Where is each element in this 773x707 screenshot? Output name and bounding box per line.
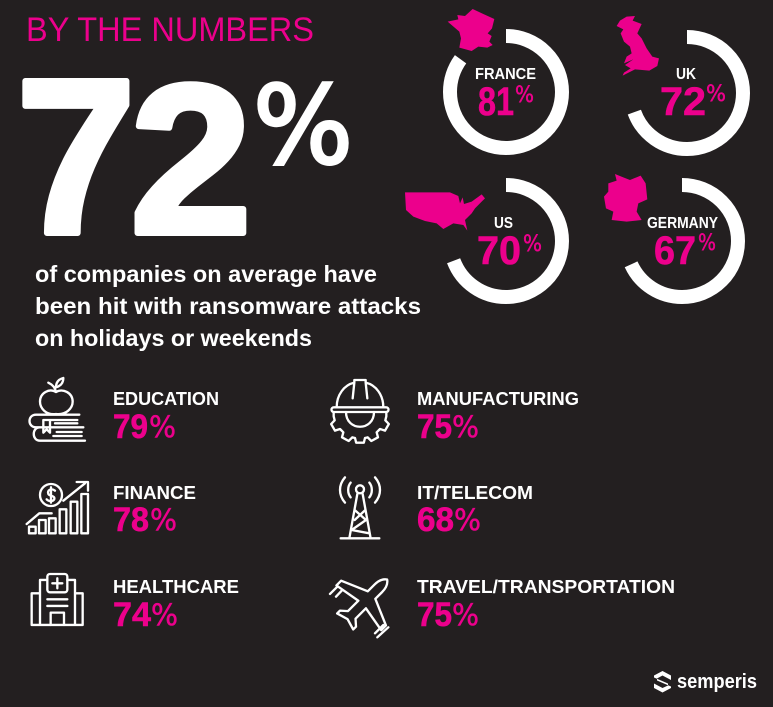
panel: IT/Telecom: % xyxy=(454,503,481,537)
panel: UK: % xyxy=(706,82,726,107)
panel: Germany: 67 xyxy=(654,229,696,273)
panel: IT/Telecom: IT/TELECOM xyxy=(417,482,533,503)
panel: Healthcare xyxy=(32,574,239,634)
panel: Travel/Transportation: 75 xyxy=(417,596,452,634)
icon: hospital building xyxy=(32,574,83,625)
title: BY THE NUMBERS xyxy=(26,11,314,49)
icon: Germany map xyxy=(604,174,647,222)
panel: UK: UK xyxy=(676,66,696,83)
icon: radio tower xyxy=(340,477,380,538)
panel: Germany xyxy=(604,174,738,297)
panel: IT/Telecom: 68 xyxy=(417,501,454,539)
panel: Education: 79 xyxy=(113,408,148,446)
headline stat: 72%: 2 xyxy=(130,41,252,279)
headline description: of companies on average have xyxy=(35,261,377,287)
panel: Finance xyxy=(27,482,196,539)
panel: Manufacturing: MANUFACTURING xyxy=(417,388,579,409)
panel: France: 81 xyxy=(478,80,514,124)
headline description xyxy=(35,261,421,351)
panel: US xyxy=(405,185,562,297)
panel: Manufacturing: 75 xyxy=(417,408,452,446)
panel: Education xyxy=(29,378,219,446)
panel: Healthcare: 74 xyxy=(113,596,151,634)
headline stat: 72%: 7 xyxy=(16,33,136,280)
panel: Germany: GERMANY xyxy=(647,215,718,232)
panel: France: % xyxy=(515,83,534,108)
panel: Finance: % xyxy=(150,503,177,537)
icon: rising bar chart with coin xyxy=(27,482,88,533)
panel: Manufacturing: % xyxy=(452,410,479,444)
panel: IT/Telecom xyxy=(340,477,533,539)
panel: France xyxy=(448,9,562,148)
icon: France map xyxy=(448,9,494,51)
icon: apple on books xyxy=(29,378,85,441)
panel: Healthcare: % xyxy=(151,598,178,632)
panel: Travel/Transportation xyxy=(323,557,675,644)
panel: Finance: 78 xyxy=(113,501,149,539)
headline stat: 72%: % xyxy=(253,64,353,189)
panel: US: US xyxy=(494,215,513,232)
icon: airplane xyxy=(323,557,410,644)
panel: US: % xyxy=(523,232,542,257)
panel: UK xyxy=(617,16,743,149)
panel: US: 70 xyxy=(477,229,521,273)
panel: Germany: % xyxy=(698,231,716,256)
icon: hard hat on gear xyxy=(331,380,389,443)
panel: Education: EDUCATION xyxy=(113,388,219,409)
headline description: been hit with ransomware attacks xyxy=(35,293,421,319)
panel: Healthcare: HEALTHCARE xyxy=(113,576,239,597)
headline stat: 72% xyxy=(16,33,353,280)
panel: Education: % xyxy=(149,410,176,444)
icon: semperis shield xyxy=(654,671,671,692)
panel: Manufacturing xyxy=(331,380,579,446)
panel: France: FRANCE xyxy=(475,66,536,83)
icon: US map xyxy=(405,192,485,231)
panel: Finance: FINANCE xyxy=(113,482,196,503)
panel: UK: 72 xyxy=(660,80,706,124)
logo: semperis: semperis xyxy=(677,671,757,693)
icon: UK map xyxy=(617,16,659,76)
panel: Travel/Transportation: TRAVEL/TRANSPORTATION xyxy=(417,576,675,597)
panel: Travel/Transportation: % xyxy=(452,598,479,632)
headline description: on holidays or weekends xyxy=(35,325,312,351)
